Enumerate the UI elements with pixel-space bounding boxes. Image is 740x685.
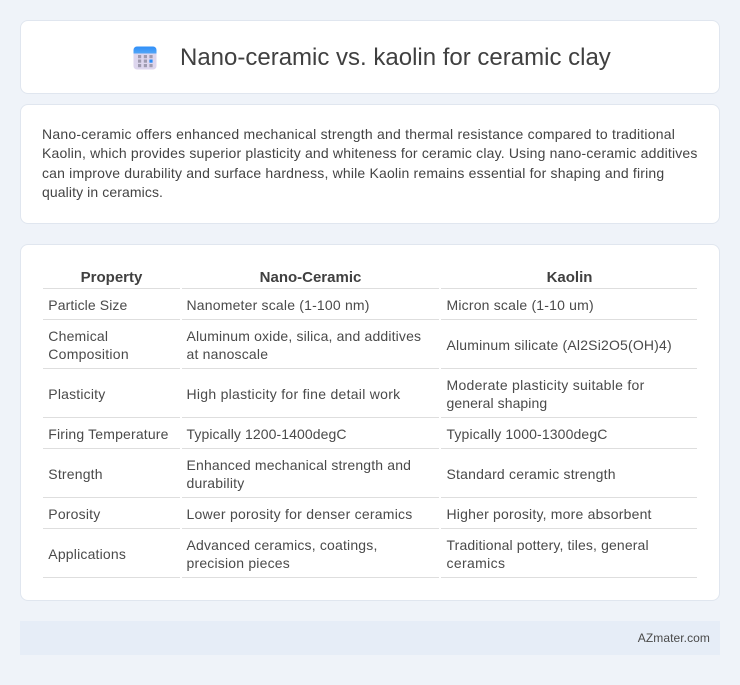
row: firing temperature [48, 426, 607, 442]
row: plasticity [48, 377, 645, 411]
header panel [20, 20, 720, 94]
row: strength [48, 457, 616, 491]
table header: Kaolin [547, 269, 592, 286]
footer bar [20, 621, 720, 655]
row: applications [48, 537, 649, 571]
row: particle size: Nanometer scale (1-100 nm) [186, 297, 370, 313]
row: particle size [48, 297, 594, 313]
row: strength: Enhanced mechanical strength and [186, 457, 411, 473]
row: chemical composition: at nanoscale [186, 346, 268, 362]
row: porosity: Porosity [48, 506, 100, 522]
summary panel [20, 104, 720, 224]
table header: Nano-Ceramic [260, 269, 361, 286]
row: applications: precision pieces [186, 555, 290, 571]
row: chemical composition: Composition [48, 346, 129, 362]
row: plasticity: High plasticity for fine detail work [186, 386, 400, 402]
row: chemical composition [48, 328, 672, 362]
comparison table panel [20, 244, 720, 601]
icon: calendar [134, 46, 156, 70]
table header [81, 269, 592, 286]
row: firing temperature: Typically 1000-1300degC [446, 426, 607, 442]
row: particle size: Particle Size [48, 297, 127, 313]
row: plasticity: general shaping [446, 395, 547, 411]
row: applications: ceramics [446, 555, 505, 571]
row: chemical composition: Chemical [48, 328, 108, 344]
row: applications: Advanced ceramics, coatings, [186, 537, 378, 553]
row: chemical composition: Aluminum oxide, silica, and additives [186, 328, 421, 344]
row: chemical composition: Aluminum silicate (Al2Si2O5(OH)4) [446, 337, 672, 353]
table header: Property [81, 269, 142, 286]
row: firing temperature: Firing Temperature [48, 426, 169, 442]
row: porosity: Higher porosity, more absorbent [446, 506, 652, 522]
row: plasticity: Plasticity [48, 386, 105, 402]
row: applications: Traditional pottery, tiles, general [446, 537, 649, 553]
row: strength: durability [186, 475, 244, 491]
summary text: quality in ceramics. [42, 184, 163, 200]
row: particle size: Micron scale (1-10 um) [446, 297, 594, 313]
row: plasticity: Moderate plasticity suitable for [446, 377, 645, 393]
title: Nano-ceramic vs. kaolin for ceramic clay [180, 44, 611, 71]
summary text: Kaolin, which provides superior plasticity and whiteness for ceramic clay. Using nano-ceramic additives [42, 145, 698, 161]
row: applications: Applications [48, 546, 126, 562]
row: strength: Standard ceramic strength [446, 466, 616, 482]
row: porosity [48, 506, 652, 522]
row: strength: Strength [48, 466, 103, 482]
row: firing temperature: Typically 1200-1400degC [186, 426, 347, 442]
summary text: Nano-ceramic offers enhanced mechanical strength and thermal resistance compared to traditional [42, 126, 675, 142]
summary text [42, 126, 698, 200]
summary text: can improve durability and surface hardness, while Kaolin remains essential for shaping and firing [42, 164, 664, 180]
row: porosity: Lower porosity for denser ceramics [186, 506, 413, 522]
footer credit: AZmater.com [638, 631, 710, 645]
